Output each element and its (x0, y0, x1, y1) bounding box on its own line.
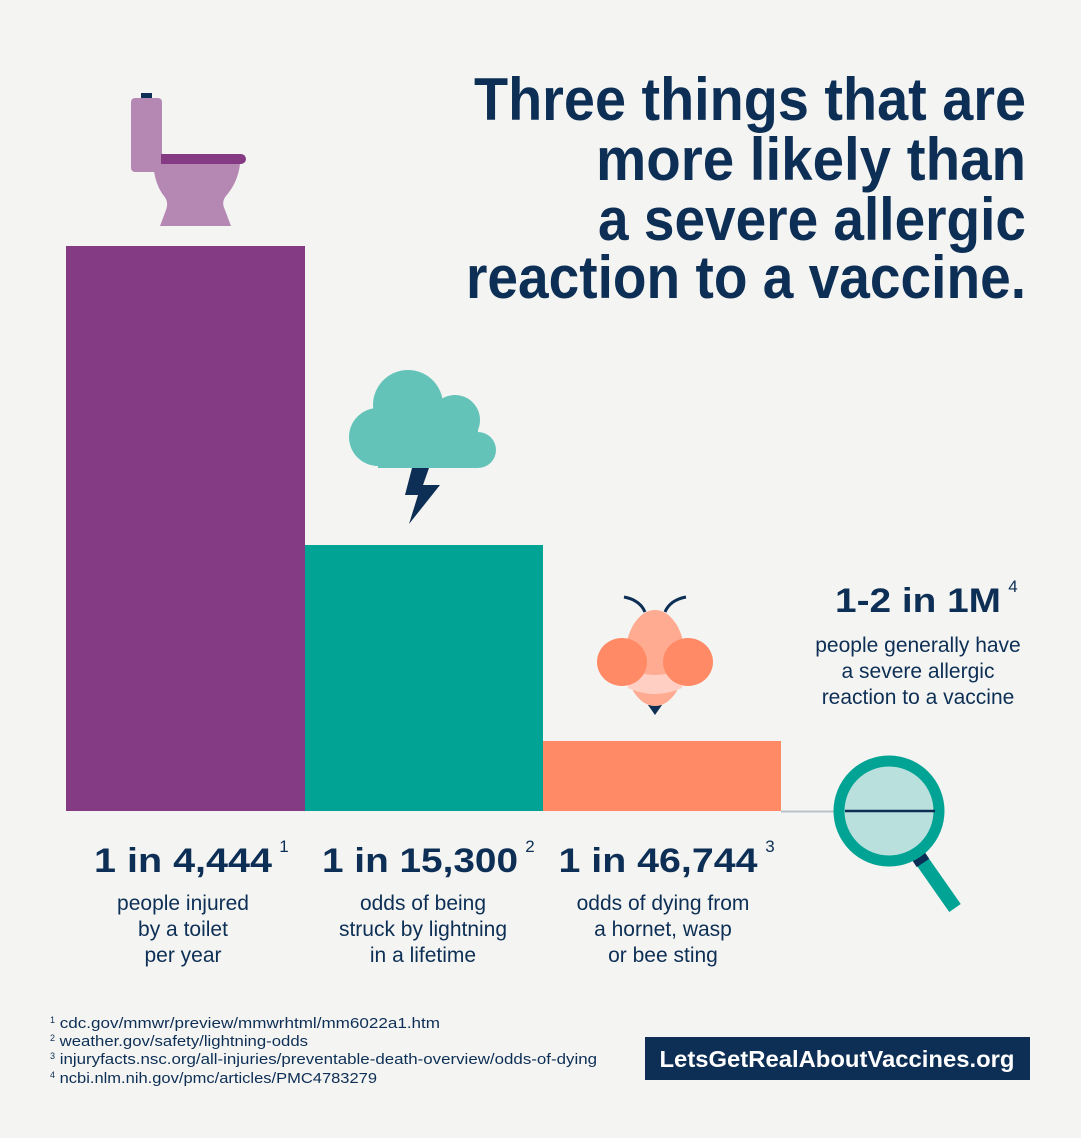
stat: vaccine: 4 (1008, 577, 1018, 596)
stat: vaccine: people generally have (815, 634, 1021, 657)
stat: vaccine (815, 577, 1021, 709)
footnotes: ncbi.nlm.nih.gov/pmc/articles/PMC4783279 (55, 1070, 377, 1087)
stat: lightning (322, 837, 535, 967)
stat: toilet (94, 837, 289, 967)
stat: sting: 3 (765, 837, 775, 856)
title: more likely than (596, 126, 1026, 193)
stat: vaccine: reaction to a vaccine (822, 686, 1014, 709)
icon: bee (597, 597, 713, 715)
bar: lightning (305, 545, 543, 811)
stat: toilet: per year (144, 944, 222, 967)
footnotes: weather.gov/safety/lightning-odds (55, 1033, 308, 1050)
title: a severe allergic (598, 186, 1026, 253)
stat: sting (558, 837, 775, 967)
stat: sting: a hornet, wasp (594, 918, 732, 941)
stat: vaccine: 1-2 in 1M (835, 582, 1001, 620)
stat: sting: odds of dying from (577, 892, 749, 915)
website badge: LetsGetRealAboutVaccines.org (660, 1046, 1014, 1072)
stat: sting: or bee sting (608, 944, 718, 967)
stat: toilet: 1 (279, 837, 289, 856)
footnotes: 4 (50, 1070, 55, 1080)
stat: lightning: odds of being (360, 892, 486, 915)
title: reaction to a vaccine. (466, 244, 1026, 311)
icon: cloud with lightning (349, 370, 496, 524)
icon: toilet (131, 93, 246, 226)
title: Three things that are (474, 66, 1026, 133)
bar: sting (543, 741, 781, 811)
footnotes: injuryfacts.nsc.org/all-injuries/preventable-death-overview/odds-of-dying (55, 1051, 597, 1068)
stat: toilet: people injured (117, 892, 249, 915)
bar: toilet (66, 246, 305, 811)
footnotes: 3 (50, 1051, 55, 1061)
stat: lightning: 2 (525, 837, 535, 856)
title (466, 66, 1026, 311)
stat: toilet: by a toilet (138, 918, 228, 941)
icon: magnifying glass (839, 761, 955, 908)
footnotes (50, 1015, 597, 1087)
stat: toilet: 1 in 4,444 (94, 842, 272, 880)
footnotes: 1 (50, 1015, 55, 1025)
footnotes: cdc.gov/mmwr/preview/mmwrhtml/mm6022a1.htm (55, 1015, 440, 1032)
stat: vaccine: a severe allergic (842, 660, 994, 683)
stat: lightning: in a lifetime (370, 944, 476, 967)
stat: lightning: 1 in 15,300 (322, 842, 518, 880)
stat: sting: 1 in 46,744 (558, 842, 758, 880)
stat: lightning: struck by lightning (339, 918, 507, 941)
footnotes: 2 (50, 1033, 55, 1043)
website badge (645, 1037, 1030, 1080)
